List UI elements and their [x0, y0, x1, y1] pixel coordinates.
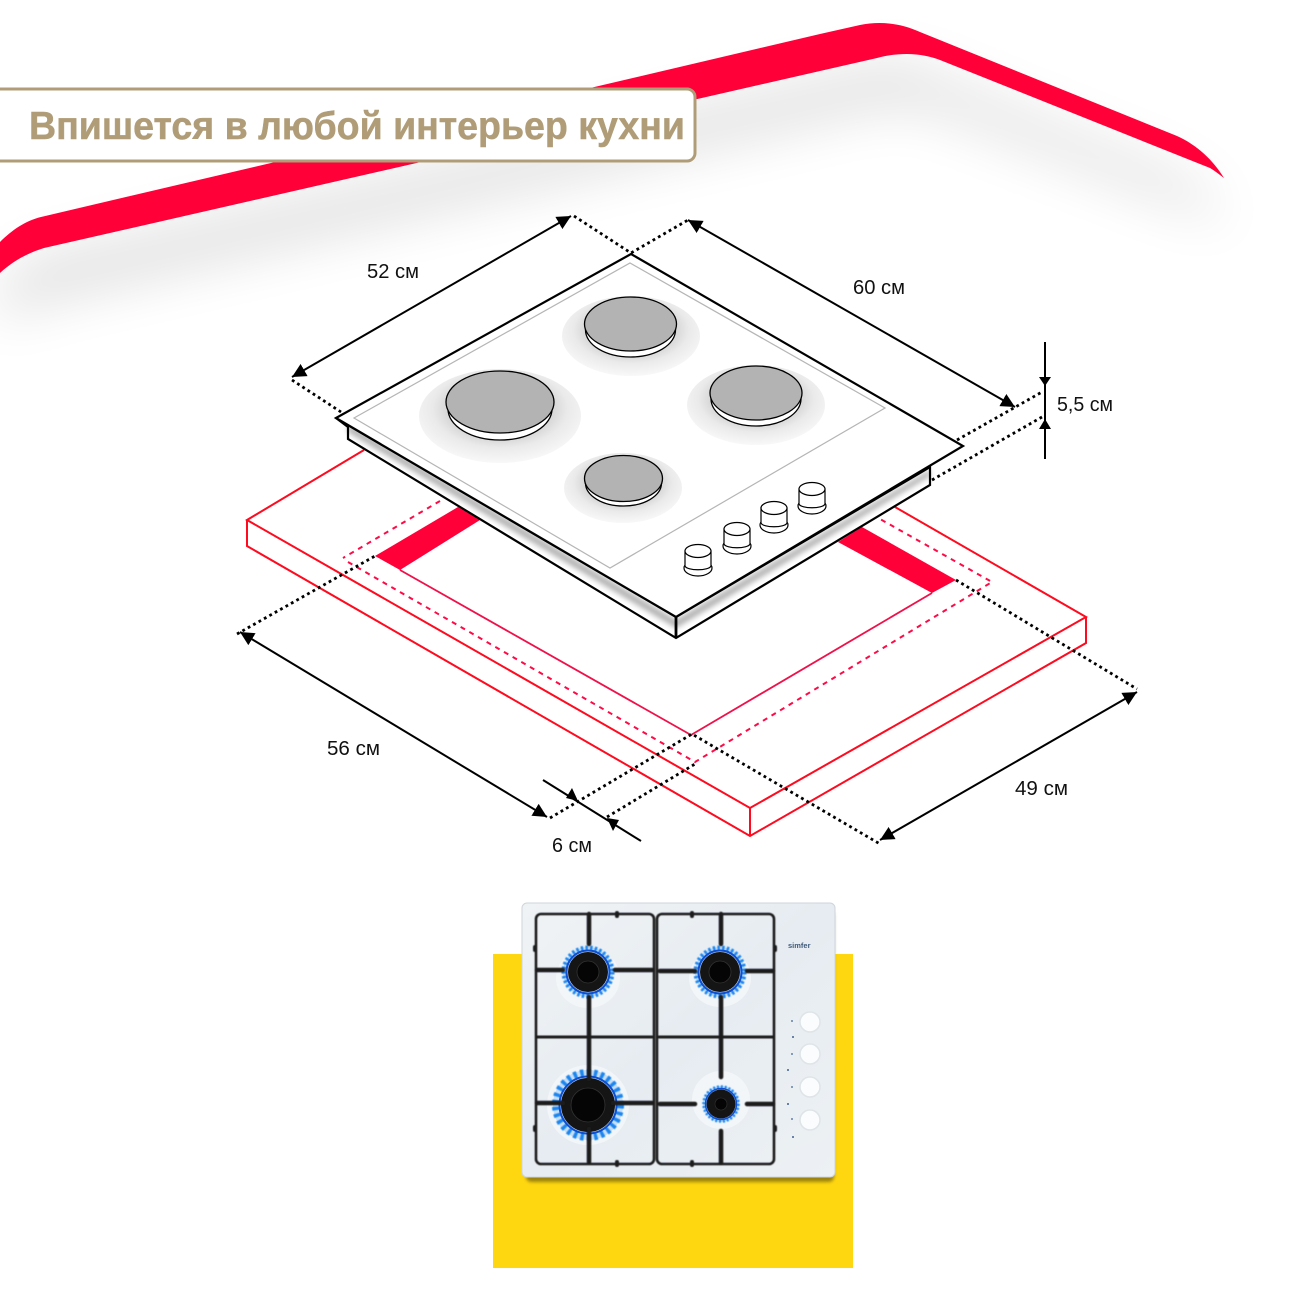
dimension: 52 cm: 52 см	[367, 260, 419, 283]
knob 3	[760, 502, 788, 533]
photo knobs	[787, 1012, 820, 1138]
knob 4	[798, 482, 826, 514]
photo shadow	[526, 910, 834, 1182]
hob side faces	[336, 418, 930, 638]
burner: right	[687, 365, 825, 445]
dimension: 60 cm: 60 см	[853, 276, 905, 299]
dimension: 56 cm: 56 см	[327, 737, 380, 760]
red opening bars	[375, 507, 956, 593]
knob 1	[684, 544, 712, 576]
burner bottom-left	[553, 1070, 623, 1140]
hob shadow	[348, 424, 930, 628]
title: Впишется в любой интерьер кухни	[29, 105, 685, 148]
burner top-left	[563, 947, 613, 997]
burner pads	[547, 948, 751, 1145]
yellow backdrop	[493, 954, 853, 1268]
brand: simfer	[788, 941, 811, 950]
ribbon shadow	[0, 66, 1230, 325]
dimension extension lines (dotted)	[237, 216, 1137, 844]
dimension: 6 cm	[543, 780, 641, 857]
title banner	[0, 89, 695, 161]
dimension: 52 cm	[292, 216, 571, 377]
dimension: 56 cm	[240, 632, 547, 817]
burner: left	[419, 369, 581, 463]
knobs	[684, 482, 826, 576]
dimension: 5,5 cm	[1039, 342, 1113, 459]
hob top face	[336, 254, 963, 617]
burner: bottom	[564, 453, 682, 523]
burner top-right	[695, 947, 745, 997]
dimension: 6 cm: 6 см	[552, 834, 592, 857]
hob diagram	[336, 254, 963, 638]
product photo: gas hob	[522, 903, 835, 1182]
dimension: 49 cm: 49 см	[1015, 777, 1068, 800]
burner bottom-right	[703, 1086, 739, 1122]
red ribbon	[0, 23, 1224, 273]
inner panel line	[354, 263, 885, 568]
grates	[535, 913, 775, 1165]
dimension: 49 cm	[880, 692, 1137, 840]
burner: top	[562, 296, 700, 376]
cutout diagram: red countertop	[247, 450, 1086, 836]
photo hob body	[522, 903, 835, 1177]
dimension: 5,5 cm: 5,5 см	[1057, 393, 1113, 416]
dimension: 60 cm	[688, 220, 1015, 407]
knob 2	[723, 522, 751, 554]
